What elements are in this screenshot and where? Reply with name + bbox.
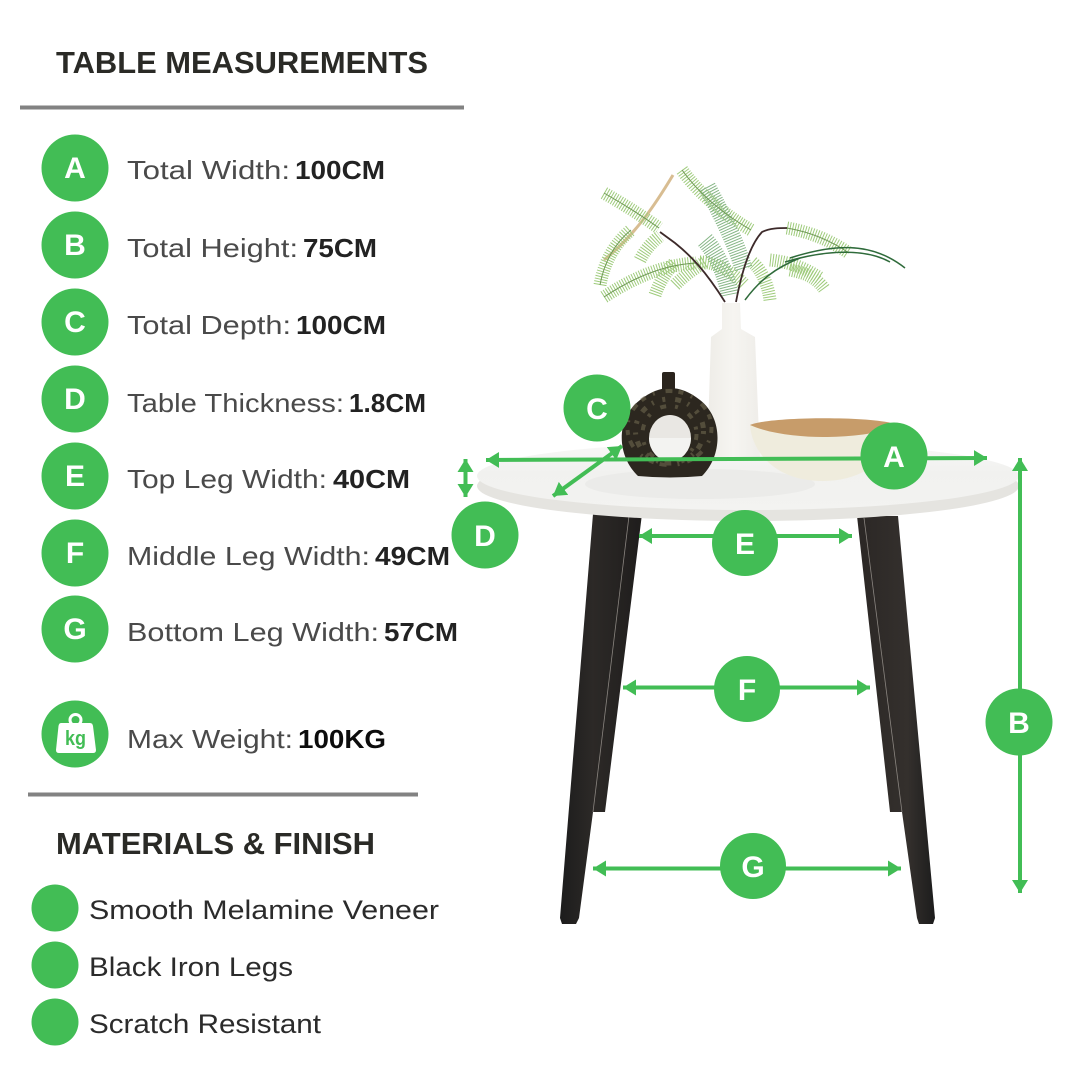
row: bottom leg width: G — [63, 613, 87, 646]
row: top leg width: 40CM — [333, 464, 410, 494]
measurement list — [42, 134, 458, 768]
dimension g: G — [741, 851, 765, 884]
dimension d — [452, 459, 518, 568]
dimension c — [553, 374, 630, 496]
row: middle leg width: 49CM — [375, 541, 450, 571]
left leg — [560, 514, 642, 924]
row: total width: A — [64, 152, 86, 185]
row: total depth: Total Depth: — [127, 310, 291, 340]
materials list — [32, 884, 439, 1046]
dimension e: E — [735, 528, 755, 561]
row: total height — [42, 212, 377, 278]
row: total width — [42, 134, 385, 202]
row: max weight: Max Weight: — [127, 724, 293, 754]
dimension b: B — [1008, 707, 1030, 740]
white vase — [707, 303, 760, 460]
row: table thickness: 1.8CM — [349, 388, 426, 418]
row: total width: 100CM — [295, 155, 385, 185]
item: melamine veneer: Smooth Melamine Veneer — [89, 895, 439, 925]
heading: materials and finish: MATERIALS & FINISH — [56, 826, 375, 861]
row: middle leg width: Middle Leg Width: — [127, 541, 370, 571]
row: bottom leg width — [42, 596, 458, 662]
dimension f — [623, 656, 870, 722]
heading: table measurements: TABLE MEASUREMENTS — [56, 45, 428, 80]
row: total depth: C — [64, 306, 86, 339]
row: total height: 75CM — [303, 233, 377, 263]
row: top leg width: E — [65, 460, 85, 493]
dimension g — [593, 833, 901, 899]
icon: weight bag — [56, 714, 96, 753]
item: scratch resistant — [32, 998, 322, 1046]
dimension b — [986, 458, 1052, 893]
illustration: table with decor — [452, 170, 1052, 924]
row: table thickness: Table Thickness: — [127, 388, 344, 418]
dimension c: C — [586, 393, 608, 426]
row: total depth: 100CM — [296, 310, 386, 340]
icon: weight bag: kg — [65, 728, 86, 750]
row: total width: Total Width: — [127, 155, 290, 185]
row: max weight — [42, 700, 386, 768]
row: table thickness — [42, 366, 426, 432]
row: middle leg width — [42, 520, 450, 586]
dark ring vase — [622, 372, 718, 478]
item: scratch resistant: Scratch Resistant — [89, 1009, 322, 1039]
row: top leg width — [42, 442, 410, 510]
bowl — [750, 418, 897, 481]
dimension a: A — [883, 441, 905, 474]
item: iron legs: Black Iron Legs — [89, 952, 293, 982]
plant — [600, 170, 905, 302]
table top — [477, 442, 1019, 521]
item: melamine veneer — [32, 884, 439, 932]
row: total height: B — [64, 229, 86, 262]
row: max weight: 100KG — [298, 724, 386, 754]
row: bottom leg width: Bottom Leg Width: — [127, 617, 379, 647]
row: bottom leg width: 57CM — [384, 617, 458, 647]
row: total depth — [42, 288, 386, 356]
row: total height: Total Height: — [127, 233, 298, 263]
item: iron legs — [32, 942, 293, 988]
dimension a — [486, 422, 987, 490]
row: top leg width: Top Leg Width: — [127, 464, 327, 494]
right leg — [857, 516, 935, 924]
dimension e — [639, 510, 852, 576]
dimension d: D — [474, 520, 496, 553]
dimension f: F — [738, 674, 756, 707]
row: middle leg width: F — [66, 537, 84, 570]
row: table thickness: D — [64, 383, 86, 416]
